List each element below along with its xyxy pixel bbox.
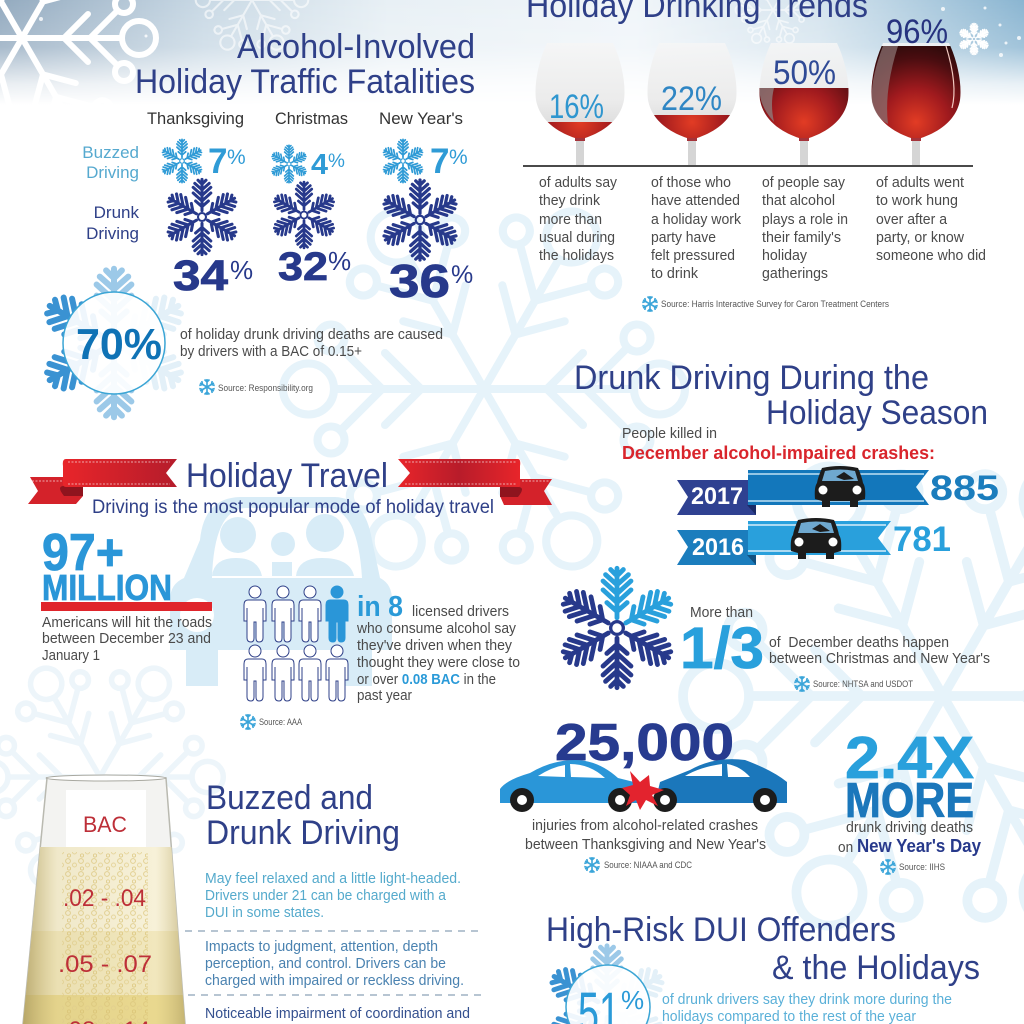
1 in 8 text: past year [357, 688, 412, 704]
source: niaaa [584, 857, 692, 873]
1 in 8 text: or over 0.08 BAC in the [357, 672, 496, 688]
70% description [180, 327, 443, 360]
source: responsibility.org [199, 379, 313, 395]
title [135, 28, 475, 101]
bac scale labels [58, 812, 152, 1024]
caption 16%: the holidays [539, 248, 614, 264]
column headings: Thanksgiving [147, 109, 244, 128]
thanksgiving buzzed 7%: % [227, 146, 246, 169]
section: high-risk dui offenders [546, 911, 980, 1024]
row label: drunk driving: Driving [86, 224, 139, 243]
2.4x more stat: 2.4X [845, 725, 974, 791]
column headings: Christmas [275, 109, 348, 128]
caption 16%: of adults say [539, 175, 618, 191]
wine glass 50% [759, 43, 849, 166]
caption 16%: usual during [539, 230, 615, 246]
bar 2016: 781: 2016 [692, 534, 744, 561]
section: buzzed and drunk driving [20, 775, 484, 1024]
level 1 description [205, 871, 461, 921]
70% callout [41, 269, 187, 417]
christmas buzzed 4% [271, 145, 345, 183]
level 1 description: Drivers under 21 can be charged with a [205, 888, 447, 904]
1 in 8 text [356, 591, 520, 704]
section: drunk driving during the holiday season [500, 359, 999, 875]
70% description: of holiday drunk driving deaths are caused [180, 327, 443, 343]
red bar [41, 602, 212, 611]
1 in 8 text: who consume alcohol say [356, 621, 517, 637]
2.4x more stat: MORE [845, 774, 974, 828]
title [206, 779, 400, 852]
title: Alcohol-Involved [237, 28, 475, 66]
51% callout [547, 946, 667, 1024]
bar 2017: 885: 2017 [691, 483, 743, 510]
new year's drunk 36%: 36 [389, 255, 450, 307]
thanksgiving drunk 34%: % [230, 255, 253, 285]
caption 22%: have attended [651, 193, 740, 209]
caption 22%: a holiday work [651, 212, 742, 228]
level 2 description: charged with impaired or reckless driving. [205, 973, 464, 989]
wine glass 50%: 50% [773, 54, 836, 92]
title: Drunk Driving During the [574, 359, 929, 397]
title: High-Risk DUI Offenders [546, 911, 896, 949]
25,000 figure: 25,000 [555, 714, 734, 772]
thanksgiving drunk 34%: 34 [173, 252, 228, 300]
level 1 description: DUI in some states. [205, 905, 324, 921]
25,000 description: injuries from alcohol-related crashes [532, 818, 758, 834]
row label: buzzed driving: Buzzed [82, 143, 139, 162]
2.4x description [838, 820, 981, 856]
level 2 description: Impacts to judgment, attention, depth [205, 939, 438, 955]
caption 96%: someone who did [876, 248, 986, 264]
70% callout: 70% [76, 320, 162, 369]
bar 2017: 885: 885 [930, 469, 999, 508]
title [546, 911, 980, 987]
97+ million stat: MILLION [42, 567, 172, 608]
source: iihs [880, 859, 945, 875]
row label: buzzed driving [82, 143, 139, 182]
caption 22%: of those who [651, 175, 731, 191]
bac scale labels: BAC [83, 812, 127, 837]
source: responsibility.org: Source: Responsibility.org [218, 383, 313, 393]
wine glass 22% [647, 43, 737, 166]
1/3 stat [680, 605, 990, 681]
1/3 stat: 1/3 [680, 616, 764, 681]
caption 22% [651, 175, 742, 282]
source: harris: Source: Harris Interactive Survey for Caron Treatment Centers [661, 299, 889, 309]
caption 50%: plays a role in [762, 212, 848, 228]
new year's drunk 36% [381, 180, 473, 307]
source: iihs: Source: IIHS [899, 862, 945, 872]
chart heading: People killed in [622, 426, 717, 442]
thanksgiving drunk 34% [165, 179, 253, 300]
section: holiday drinking trends [523, 0, 986, 312]
level 2 description [205, 939, 464, 989]
people icon array: 1 in 8 [244, 586, 348, 701]
wine glass 96% [871, 13, 961, 166]
level 3 description: Noticeable impairment of coordination and [205, 1006, 470, 1022]
97+ million description: January 1 [42, 648, 100, 664]
new year's buzzed 7% [382, 139, 468, 183]
caption 16%: more than [539, 212, 602, 228]
christmas drunk 32%: % [328, 246, 351, 276]
caption 22%: felt pressured [651, 248, 735, 264]
25,000 description: between Thanksgiving and New Year's [525, 837, 766, 853]
new year's buzzed 7%: % [449, 146, 468, 169]
caption 50%: gatherings [762, 266, 828, 282]
caption 16%: they drink [539, 193, 601, 209]
wine glass 22%: 22% [661, 80, 722, 118]
97+ million stat [42, 524, 172, 608]
title: & the Holidays [772, 949, 980, 987]
caption 50%: their family's [762, 230, 841, 246]
column headings [147, 109, 463, 128]
97+ million description: Americans will hit the roads [42, 615, 212, 631]
row label: drunk driving: Drunk [94, 203, 139, 222]
1/3 stat: between Christmas and New Year's [769, 651, 990, 667]
christmas drunk 32% [272, 182, 351, 289]
section: holiday travel [28, 457, 552, 730]
new year's buzzed 7%: 7 [430, 142, 449, 181]
bar 2016: 781: 781 [893, 520, 951, 559]
title [574, 359, 988, 432]
caption 96%: to work hung [876, 193, 958, 209]
bar 2016: 781 [677, 518, 951, 565]
25,000 description [525, 818, 766, 853]
row label: drunk driving [86, 203, 139, 243]
caption 22%: to drink [651, 266, 699, 282]
champagne glass [20, 775, 190, 1024]
title: Holiday Travel [186, 457, 388, 495]
subtitle: Driving is the most popular mode of holiday travel [92, 497, 494, 518]
caption 22%: party have [651, 230, 716, 246]
1/3 stat: More than [690, 605, 753, 621]
97+ million description: between December 23 and [42, 631, 211, 647]
source: aaa [240, 714, 302, 730]
caption 16% [539, 175, 618, 264]
wine glass 16% [536, 60, 624, 165]
chart heading: December alcohol-impaired crashes: [622, 443, 935, 463]
title: Drunk Driving [206, 814, 400, 852]
2.4x description: on New Year's Day [838, 836, 981, 856]
source: nhtsa [794, 676, 913, 692]
new year's drunk 36%: % [451, 261, 473, 289]
christmas drunk 32%: 32 [278, 245, 328, 289]
1 in 8 text: they've driven when they [357, 638, 513, 654]
51% description [662, 992, 952, 1024]
source: niaaa: Source: NIAAA and CDC [604, 860, 692, 870]
title: Holiday Season [766, 394, 988, 432]
bac scale labels: .02 - .04 [63, 885, 146, 912]
two-colour snowflake [558, 568, 676, 688]
level 2 description: perception, and control. Drivers can be [205, 956, 446, 972]
caption 50%: holiday [762, 248, 808, 264]
crash illustration [500, 759, 787, 812]
wine glass 96%: 96% [886, 13, 948, 51]
2.4x description: drunk driving deaths [846, 820, 973, 836]
bac scale labels: .05 - .07 [58, 951, 152, 978]
1 in 8 text: thought they were close to [357, 655, 520, 671]
source: aaa: Source: AAA [259, 717, 302, 727]
title: Holiday Traffic Fatalities [135, 63, 475, 101]
row label: buzzed driving: Driving [86, 163, 139, 182]
caption 96%: over after a [876, 212, 948, 228]
wine glass 16%: 16% [549, 88, 604, 126]
caption 50%: that alcohol [762, 193, 835, 209]
bar 2017: 885 [677, 466, 999, 515]
source: harris [642, 296, 889, 312]
caption 50% [762, 175, 848, 282]
caption 96% [876, 175, 986, 264]
97+ million stat: 97+ [42, 524, 124, 582]
christmas buzzed 4%: 4 [311, 149, 328, 181]
2.4x more stat [845, 725, 974, 828]
51% description: of drunk drivers say they drink more during the [662, 992, 952, 1008]
70% description: by drivers with a BAC of 0.15+ [180, 344, 362, 360]
1 in 8 text: licensed drivers [412, 604, 509, 620]
thanksgiving buzzed 7% [161, 139, 246, 183]
1 in 8 text: in 8 [357, 591, 403, 623]
source: nhtsa: Source: NHTSA and USDOT [813, 679, 913, 689]
thanksgiving buzzed 7%: 7 [208, 142, 227, 181]
caption 96%: of adults went [876, 175, 964, 191]
christmas buzzed 4%: % [328, 151, 345, 172]
level 1 description: May feel relaxed and a little light-headed. [205, 871, 461, 887]
shelf line [523, 165, 973, 167]
background car with family [170, 497, 392, 686]
caption 50%: of people say [762, 175, 846, 191]
column headings: New Year's [379, 109, 463, 128]
ribbon right [398, 459, 552, 505]
chart heading [622, 426, 935, 463]
title: Buzzed and [206, 779, 373, 817]
51% callout: % [621, 985, 644, 1015]
section: alcohol-involved holiday traffic fatalities [41, 28, 475, 417]
caption 96%: party, or know [876, 230, 965, 246]
ribbon left [28, 459, 177, 504]
1/3 stat: of December deaths happen [769, 635, 949, 651]
97+ million description [42, 615, 212, 664]
